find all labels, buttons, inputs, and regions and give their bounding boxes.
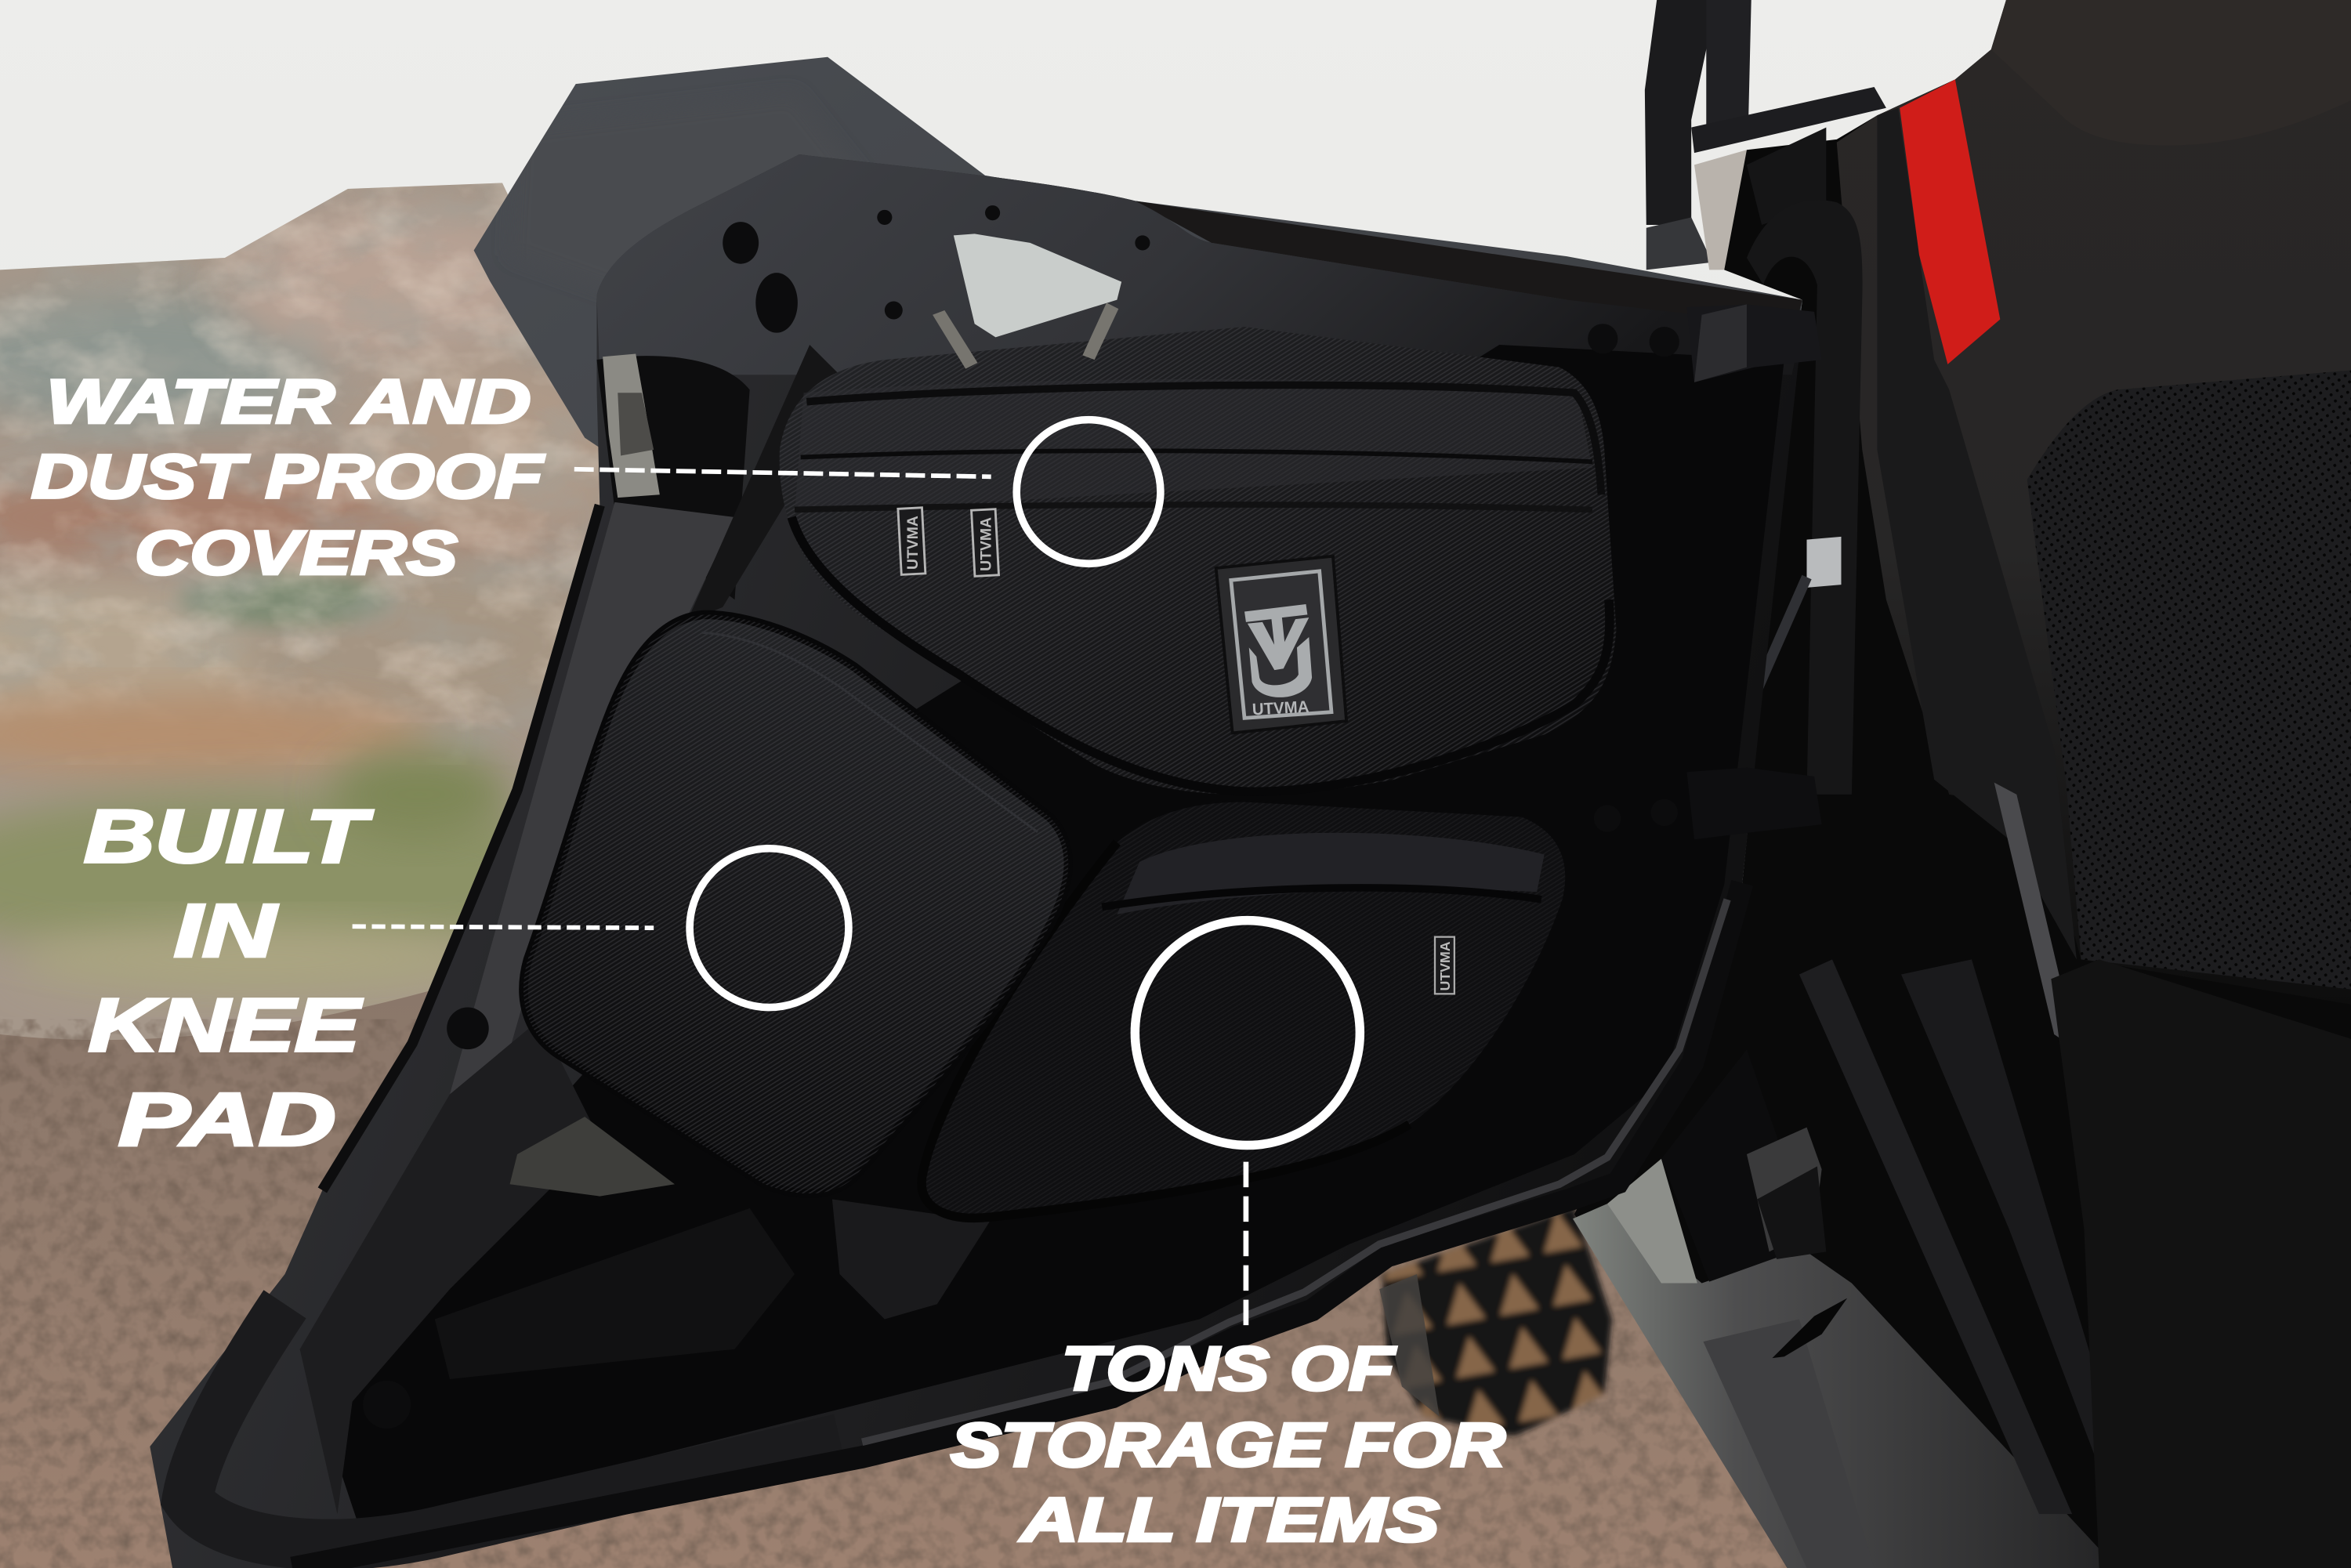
logo patch: UTVMA	[1252, 698, 1310, 719]
background: dirt ground	[0, 990, 1844, 1568]
vehicle sill and side body	[1573, 1049, 2117, 1568]
heading: built in knee pad: IN	[174, 889, 278, 972]
callout: water and dust proof covers	[31, 367, 1161, 588]
tire	[1379, 1207, 1612, 1436]
rear headrest mesh	[1747, 128, 1826, 225]
leader line: covers	[574, 469, 991, 476]
door: left edge trim	[322, 505, 600, 1190]
heading: water and dust proof covers: DUST PROOF	[31, 442, 545, 511]
seat mesh panel	[2027, 371, 2351, 990]
zipper pull	[898, 508, 926, 574]
roll cage tubes	[1645, 0, 1886, 270]
lower mounting tab	[832, 1199, 990, 1319]
zipper pull	[972, 509, 999, 576]
heading: built in knee pad: BUILT	[84, 795, 374, 878]
lower door latch	[1686, 767, 1822, 839]
bag: lower storage bag	[922, 802, 1565, 1218]
heading: built in knee pad	[84, 795, 374, 1162]
highlight circle: covers	[1016, 420, 1161, 563]
mounting strap	[686, 345, 855, 622]
background: mountain hillside	[0, 183, 600, 1040]
heading: tons of storage for all items: ALL ITEMS	[1019, 1486, 1440, 1555]
callout: tons of storage	[951, 921, 1505, 1555]
seat cushion	[2051, 959, 2351, 1568]
heading: tons of storage for all items: TONS OF	[1062, 1334, 1396, 1403]
heading: water and dust proof covers: WATER AND	[46, 367, 531, 436]
bag: upper storage bag	[780, 327, 1616, 795]
upper door latch	[1686, 304, 1822, 382]
heading: water and dust proof covers: COVERS	[135, 519, 458, 588]
interior shadow behind door and seat	[1574, 0, 2351, 1568]
zipper pull: UTVMA	[979, 517, 995, 571]
door post and latch striker	[1724, 200, 1863, 795]
fasteners	[363, 205, 1679, 1429]
door: main panel	[150, 154, 1802, 1568]
heading: tons of storage for all items: STORAGE FOR	[951, 1410, 1505, 1479]
door: upper shell	[473, 56, 1802, 882]
leader line: storage	[1244, 1162, 1248, 1327]
zipper pull: UTVMA	[1437, 941, 1453, 990]
heading: built in knee pad: KNEE	[89, 983, 363, 1067]
bag: knee pad	[523, 614, 1068, 1193]
top zipper tags	[933, 302, 1118, 369]
highlight circle: knee pad	[690, 849, 849, 1008]
callout: built in knee pad	[84, 795, 849, 1162]
aluminium window plate	[954, 234, 1121, 337]
zipper pull	[1435, 937, 1454, 994]
leader line: knee pad	[353, 926, 654, 928]
heading: tons of storage for all items	[951, 1334, 1505, 1555]
heading: water and dust proof covers	[31, 367, 545, 588]
red seat accent	[1900, 79, 2000, 364]
zipper pull: UTVMA	[905, 516, 922, 570]
heading: built in knee pad: PAD	[118, 1078, 336, 1162]
seat back and headrest	[1837, 0, 2351, 1005]
highlight circle: storage	[1135, 921, 1360, 1146]
logo patch	[1216, 556, 1346, 733]
sticker	[1772, 1298, 1847, 1358]
chassis tube and seat belt	[1799, 783, 2111, 1514]
door pocket and rectangular latch	[435, 1117, 795, 1379]
fuel cap	[1747, 1128, 1826, 1259]
door hinge	[603, 353, 660, 498]
door: rubber seal	[292, 883, 1742, 1568]
